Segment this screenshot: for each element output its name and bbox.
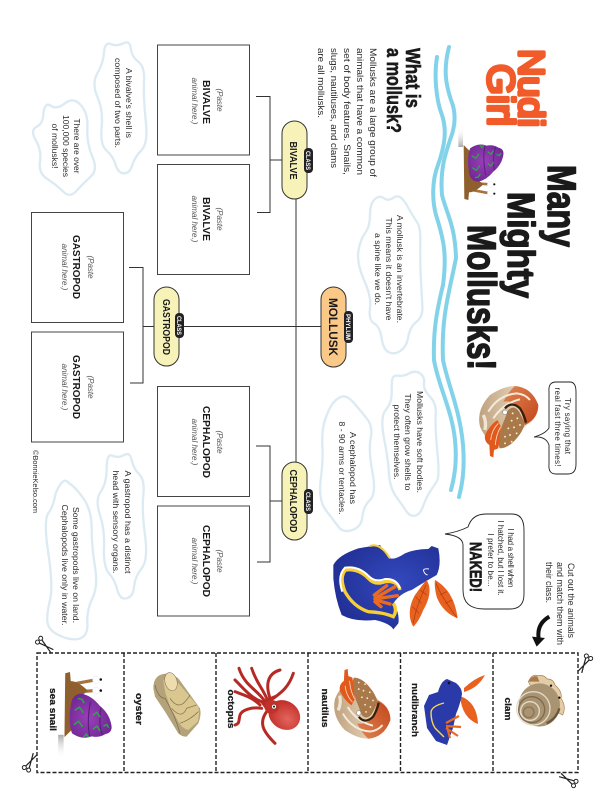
waves	[433, 47, 464, 497]
card: oyster	[133, 671, 201, 737]
text block: What is a mollusk?	[316, 48, 423, 177]
speech bubble: naked: I hatched, but I lost it.	[496, 520, 505, 596]
instruction text: Cut out the animals	[566, 563, 576, 638]
box: gastropod 1: (Paste	[86, 255, 95, 279]
text block: What is a mollusk?: set of body features. Snails,	[342, 48, 352, 175]
callout: bivalve shell: A bivalve's shell is	[124, 68, 134, 138]
box: cephalopod 1	[158, 386, 250, 496]
callout: species count: There are over	[72, 118, 82, 174]
callout: invertebrate: A mollusk is an invertebrate.	[395, 215, 405, 323]
callout: soft bodies: They often grow shells to	[403, 394, 413, 491]
callout: soft bodies: protect themselves.	[392, 404, 402, 480]
dashed cut lines	[37, 653, 578, 772]
instruction text	[544, 562, 576, 645]
callout: cephalopod arms	[320, 396, 374, 531]
box: gastropod 2: (Paste	[86, 375, 95, 399]
node: mollusk phylum: PHYLUM	[344, 314, 351, 340]
icon: scissors top left	[35, 635, 55, 655]
box: bivalve 2: animal here.)	[190, 196, 199, 243]
card: nudibranch: nudibranch	[409, 683, 420, 737]
callout: bivalve shell: composed of two parts.	[113, 58, 123, 148]
card: nudibranch	[409, 675, 485, 745]
box: cephalopod 2: (Paste	[215, 549, 224, 573]
callout: soft bodies	[382, 372, 439, 516]
box: bivalve 1	[158, 45, 250, 155]
instruction text: and match them with	[555, 562, 565, 645]
node: mollusk phylum	[321, 287, 353, 367]
card: nautilus	[319, 669, 390, 739]
box: bivalve 2: (Paste	[215, 207, 224, 231]
speech bubble: naked: I had a shell when	[506, 528, 515, 588]
node: bivalve class: BIVALVE	[287, 142, 298, 180]
copyright: ©BonnieKelso.com	[31, 450, 40, 513]
box: bivalve 2: BIVALVE	[200, 197, 212, 241]
callout: land and water: Some gastropods live on land.	[71, 507, 81, 623]
node: cephalopod class: CEPHALOPOD	[287, 470, 298, 532]
text block: What is a mollusk?: Mollusks are a large group of	[368, 48, 378, 177]
card: nautilus: nautilus	[319, 688, 330, 728]
logo: Nudi Girl: Nudi	[511, 49, 552, 127]
title: Mighty	[499, 192, 541, 298]
node: bivalve class	[282, 121, 313, 199]
text block: What is a mollusk?: slugs, nautiluses, and clams	[329, 48, 339, 168]
icon: blue nudibranch	[333, 545, 458, 629]
title	[459, 165, 583, 370]
icon: scissors bottom left	[22, 752, 39, 773]
callout: gastropod head: A gastropod has a distinct	[123, 470, 133, 574]
speech bubble: naked: NAKED!	[466, 542, 485, 592]
callout: soft bodies: Mollusks have soft bodies.	[415, 391, 425, 493]
callout: gastropod head	[98, 454, 146, 599]
icon: scissors bottom right	[558, 771, 579, 788]
node: gastropod class: CLASS	[175, 316, 182, 336]
node: cephalopod class	[282, 462, 313, 540]
callout: cephalopod arms: 8 - 90 arms or tentacles.	[337, 422, 347, 514]
speech bubble: naked	[445, 514, 524, 609]
callout: cephalopod arms: A cephalopod has	[348, 432, 358, 504]
text block: What is a mollusk?: are all mollusks.	[316, 48, 326, 118]
box: gastropod 1	[32, 212, 124, 322]
icon: nautilus	[479, 386, 538, 457]
logo: Nudi Girl: Girl	[479, 64, 521, 126]
box: cephalopod 1: animal here.)	[190, 419, 199, 466]
box: cephalopod 1: CEPHALOPOD	[200, 406, 212, 478]
box: bivalve 2	[158, 164, 250, 274]
box: gastropod 1: GASTROPOD	[70, 235, 82, 299]
card: clam: clam	[502, 698, 513, 720]
icon: scissors top right	[576, 653, 593, 674]
instruction text: their class.	[544, 562, 554, 603]
box: gastropod 2: GASTROPOD	[70, 355, 82, 419]
text block: What is a mollusk?: What is	[401, 48, 423, 108]
card: oyster: oyster	[133, 693, 144, 725]
box: cephalopod 1: (Paste	[215, 430, 224, 454]
text block: What is a mollusk?: animals that have a common	[355, 48, 365, 175]
node: gastropod class: GASTROPOD	[160, 299, 171, 355]
logo: Nudi Girl	[479, 49, 552, 127]
callout: gastropod head: head with sensory organs.	[111, 470, 121, 574]
card: sea snail: sea snail	[47, 688, 58, 731]
callout: land and water	[46, 481, 96, 639]
connector lines	[129, 96, 321, 562]
callout: invertebrate: This means it doesn't have	[384, 218, 394, 321]
callout: species count: of mollusks!	[50, 124, 60, 168]
node: mollusk phylum: MOLLUSK	[326, 298, 338, 357]
speech bubble: naked: I prefer to be...	[486, 534, 495, 586]
box: cephalopod 2: animal here.)	[190, 538, 199, 585]
box: cephalopod 2	[158, 506, 250, 616]
box: gastropod 2: animal here.)	[60, 364, 69, 411]
node: gastropod class	[154, 287, 184, 366]
text block: What is a mollusk?: a mollusk?	[382, 48, 404, 133]
callout: land and water: Cephalopods live only in water.	[60, 505, 70, 625]
box: cephalopod 2: CEPHALOPOD	[200, 525, 212, 597]
card: clam	[502, 675, 564, 727]
node: cephalopod class: CLASS	[304, 492, 311, 512]
box: gastropod 2	[32, 332, 124, 442]
card: sea snail	[47, 672, 112, 759]
speech bubble: tongue twister	[534, 382, 576, 474]
callout: species count: 100,000 species	[61, 115, 71, 177]
callout: bivalve shell	[94, 42, 146, 173]
callout: invertebrate: a spine like we do.	[373, 233, 383, 305]
icon: sea snail	[458, 127, 503, 200]
callout: species count	[33, 100, 95, 195]
box: bivalve 1: (Paste	[215, 88, 224, 112]
node: bivalve class: CLASS	[304, 151, 311, 171]
chart: classification tree	[32, 45, 353, 616]
title: Mollusks!	[459, 225, 503, 370]
box: gastropod 1: animal here.)	[60, 244, 69, 291]
speech bubble: tongue twister: Try saying that	[563, 398, 572, 455]
card: octopus: octopus	[225, 690, 236, 728]
panel: header	[433, 47, 583, 497]
callout: invertebrate	[358, 196, 422, 353]
card: octopus	[225, 668, 306, 743]
box: bivalve 1: BIVALVE	[200, 80, 212, 124]
title: Many	[539, 165, 583, 248]
panel: cut-out strip	[37, 653, 578, 772]
box: bivalve 1: animal here.)	[190, 78, 199, 125]
speech bubble: tongue twister: real fast three times!	[553, 388, 562, 466]
arrow	[532, 617, 549, 647]
